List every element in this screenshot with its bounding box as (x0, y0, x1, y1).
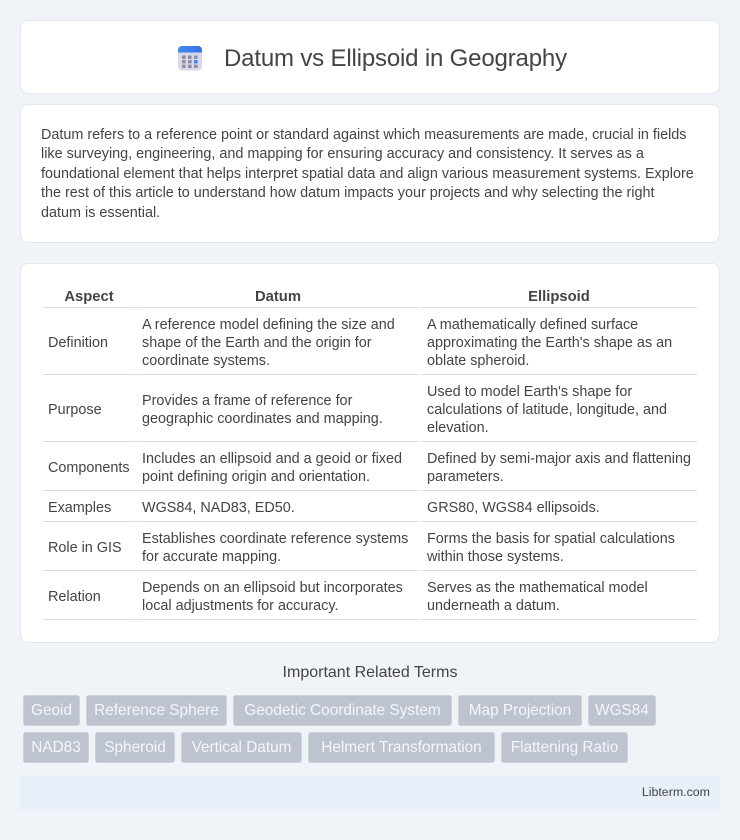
related term tags: WGS84 (595, 702, 649, 719)
table: local adjustments for accuracy. (142, 598, 338, 614)
related term tags: Spheroid (104, 739, 166, 756)
table: shape of the Earth and the origin for (142, 335, 372, 351)
related term tags: Helmert Transformation (321, 739, 482, 756)
intro paragraph (41, 126, 694, 221)
table: Defined by semi-major axis and flattening (427, 451, 691, 467)
related term tags: NAD83 (31, 739, 81, 756)
table: Forms the basis for spatial calculations (427, 531, 675, 547)
intro paragraph: foundational element that helps interpret spatial data and align various measurement systems. Explore (41, 166, 694, 182)
icon: calendar (178, 46, 202, 70)
table: Serves as the mathematical model (427, 580, 648, 596)
table: Establishes coordinate reference systems (142, 531, 408, 547)
table: WGS84, NAD83, ED50. (142, 500, 295, 516)
intro paragraph: like surveying, engineering, and mapping for ensuring accuracy and consistency. It serves as a (41, 146, 644, 162)
column header: Datum: Datum (255, 289, 301, 305)
intro paragraph: the rest of this article to understand how datum impacts your projects and why selecting the right (41, 185, 655, 201)
table: geographic coordinates and mapping. (142, 411, 383, 427)
footer credit: Libterm.com (642, 785, 710, 799)
related term tags: Geodetic Coordinate System (244, 702, 441, 719)
table: calculations of latitude, longitude, and (427, 402, 667, 418)
related term tags: Geoid (31, 702, 72, 719)
related term tags: Reference Sphere (94, 702, 219, 719)
table: Includes an ellipsoid and a geoid or fixed (142, 451, 402, 467)
related term tags: Flattening Ratio (511, 739, 618, 756)
related term tags: Vertical Datum (192, 739, 291, 756)
row: Relation: Relation (48, 589, 101, 605)
table: for accurate mapping. (142, 549, 281, 565)
row: Role in GIS: Role in GIS (48, 540, 122, 556)
header card (20, 20, 720, 94)
table: A mathematically defined surface (427, 317, 638, 333)
row: Purpose: Purpose (48, 402, 102, 418)
table: oblate spheroid. (427, 353, 529, 369)
table: Used to model Earth's shape for (427, 384, 632, 400)
table: A reference model defining the size and (142, 317, 395, 333)
title: Datum vs Ellipsoid in Geography (224, 45, 567, 72)
row: Examples: Examples (48, 500, 111, 516)
table: underneath a datum. (427, 598, 560, 614)
table: point defining origin and orientation. (142, 469, 370, 485)
footer bar (20, 776, 720, 810)
row: Components: Components (48, 460, 130, 476)
intro paragraph: datum is essential. (41, 205, 160, 221)
related term tags: Map Projection (469, 702, 571, 719)
column header: Aspect: Aspect (64, 289, 114, 305)
column header: Ellipsoid: Ellipsoid (528, 289, 590, 305)
panel: intro (20, 104, 720, 243)
table: elevation. (427, 420, 489, 436)
table: approximating the Earth's shape as an (427, 335, 672, 351)
table: parameters. (427, 469, 504, 485)
related terms heading: Important Related Terms (283, 664, 457, 681)
intro paragraph: Datum refers to a reference point or standard against which measurements are made, crucial in fields (41, 126, 686, 142)
table: within those systems. (427, 549, 564, 565)
table: Provides a frame of reference for (142, 393, 352, 409)
related term tags (23, 695, 656, 763)
panel: comparison table (20, 263, 720, 643)
table: Depends on an ellipsoid but incorporates (142, 580, 403, 596)
table: coordinate systems. (142, 353, 270, 369)
table: GRS80, WGS84 ellipsoids. (427, 500, 600, 516)
row: Definition: Definition (48, 335, 108, 351)
